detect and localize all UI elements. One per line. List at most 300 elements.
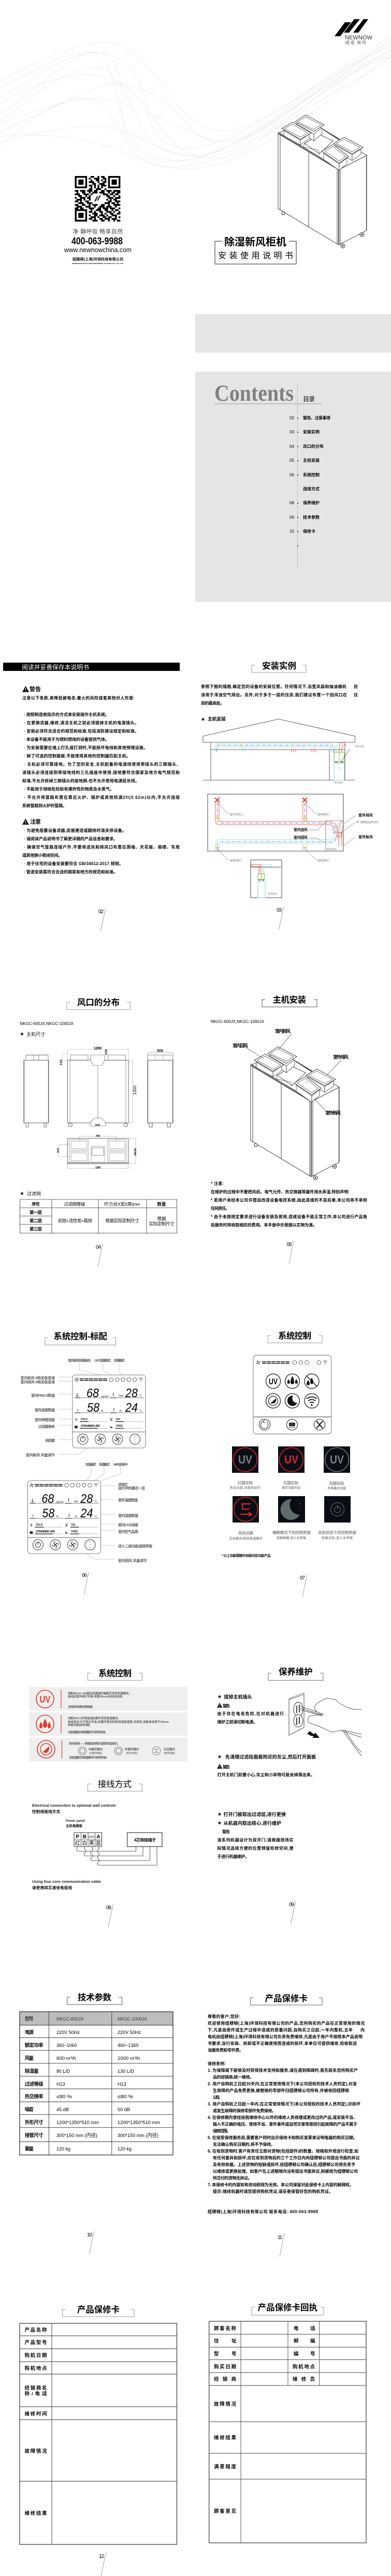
table: warranty card <box>20 2323 177 2544</box>
contents list: 05 <box>289 458 294 463</box>
cover: product illustration <box>278 115 367 248</box>
table: filter: 尺寸(长X宽X厚)mm <box>104 1202 140 1207</box>
cable note english: Using four core communication cable <box>32 1879 101 1884</box>
page 11: warranty introduction: 书要求,自行安装、拆卸或不正确使用而造成的损坏,本单位可提供维修,但收取适 <box>208 2041 357 2046</box>
status tile: red circle grey icon <box>232 1446 258 1473</box>
receipt labels: 号 <box>310 2351 315 2357</box>
diagram: floor plan of ducts: 室内回风口 <box>317 859 329 862</box>
page 11: warranty introduction: 电机由纽穗顿(上海)环境科技有限公司负责免费维修,凡是由于用户不按照本产品说明 <box>208 2034 363 2039</box>
contents list: 03 <box>289 430 294 434</box>
tile captions row 1: 有此功能,功能未运行 <box>230 1486 260 1490</box>
logo: NEWNOW: NEWNOW <box>345 35 373 41</box>
page 04: sub heading unit size: 主机尺寸 <box>26 1031 45 1037</box>
table row labels: 过滤等级 <box>25 2081 44 2087</box>
tile captions row 1: 红圈红标 <box>284 1480 299 1485</box>
page number 12 <box>99 2553 106 2576</box>
status tile: red circle grey icon: UV <box>238 1453 252 1466</box>
wiring diagram: A <box>96 1834 100 1840</box>
tile captions row 1: 表示功能开启 <box>282 1486 300 1490</box>
receipt labels: 维修员 <box>293 2376 315 2382</box>
power panel label: Power panel <box>66 1819 85 1823</box>
tile captions row 2 <box>229 1530 356 1541</box>
page 09: unplug step text: ★ <box>218 1694 222 1699</box>
icon: filter <box>287 1419 297 1430</box>
table column NKGC-1000JX: 1000 m³/h <box>118 2056 140 2061</box>
page 06: right labels: 室内温度数值 <box>118 1513 138 1518</box>
table: filter: 第三层 <box>30 1226 42 1232</box>
page 11: warranty introduction: 欢迎使用纽穗顿(上海)环境科技有限公司的产品,您所购买的产品在正常使用的情况 <box>208 2021 365 2026</box>
table column NKGC-600JX: 80 L/D <box>56 2069 70 2074</box>
page 06: left labels: 关机键 <box>45 1438 55 1443</box>
page number 08: 08 <box>106 1905 111 1911</box>
control panel display: annotated view 1: % <box>101 1410 104 1413</box>
page 06: panel 2 leader lines <box>77 1467 121 1559</box>
warranty card labels: 维修时间 <box>25 2411 47 2417</box>
page 06: heading 系统控制-标配 <box>45 1331 116 1345</box>
table column NKGC-1000JX: ≤80 % <box>118 2094 134 2100</box>
diagram: floor plan of ducts: 室内新风口 <box>317 813 329 816</box>
page number 06 <box>82 1572 89 1595</box>
contents list: 保修卡 <box>303 529 315 534</box>
page 03: intro text: 该用于浑浊空气排出。另外,对于多于一层的住房,我们建议布置一个回风口在 <box>201 692 347 697</box>
control panel display: annotated view 1: ℃ <box>139 1410 142 1413</box>
control panel display: annotated view 1: ug/m³ <box>101 1395 109 1398</box>
status tile: red circle red icon: UV <box>284 1453 298 1466</box>
QR code <box>75 176 120 222</box>
page 09: unplug step text: 维护之前请切断电源。 <box>218 1719 257 1724</box>
page 08: heading 接线方式 <box>88 1779 142 1791</box>
card: air direction control: 外循环模式 <box>125 1747 139 1751</box>
icon: wifi <box>305 1394 319 1408</box>
page 03: sub heading main unit installation <box>201 716 226 722</box>
page 11: warranty terms: 有任何差异和损坏,应在收到货物后的三个工作日内向纽穗顿公司提出书面的异议 <box>213 2155 360 2160</box>
page 04: model names: NKGC-600JX,NKGC-1000JX <box>20 1021 74 1026</box>
receipt labels: 邮 <box>294 2338 299 2344</box>
page 11: warranty introduction: 内 <box>360 2027 365 2032</box>
warranty card labels: 称 / 电 话 <box>25 2391 47 2397</box>
page 09: clean panel step text: 先清理过滤段面板附近的灰尘,然后打开面板 <box>225 1754 316 1760</box>
wiring caption chinese: 控制线接线方式 <box>32 1809 60 1814</box>
table column NKGC-600JX: ≤80 % <box>56 2094 73 2100</box>
table column NKGC-600JX: 600 m³/h <box>56 2056 76 2061</box>
page 03: intro text: 应 <box>354 684 358 689</box>
page 02: black heading bar: 阅读并妥善保存本说明书 <box>22 663 89 671</box>
control panel display: annotated view 2: % <box>56 1515 59 1518</box>
page number 07 <box>300 1574 307 1597</box>
page number 09: 09 <box>289 1902 294 1908</box>
receipt labels: 电 <box>294 2325 299 2332</box>
page 02: warning text: · 为安装需要在墙上打孔或打洞时,不能损坏电线和其他预埋设施。 <box>24 745 148 750</box>
page 06: panel 2 top labels <box>85 1462 128 1467</box>
control panel display: annotated view 1: CO₂ <box>116 1418 121 1421</box>
cover: flowing wave lines <box>0 36 391 169</box>
tile footnote: * 以上功能需额外加装对应功能产品 <box>222 1553 271 1558</box>
table column NKGC-1000JX: 460~1360 <box>118 2043 139 2048</box>
page 03: heading 安装实例 <box>252 661 306 672</box>
status tile: grey circle grey icon: UV <box>330 1453 344 1466</box>
table column NKGC-600JX: 45 dB <box>56 2107 69 2113</box>
control panel display: annotated view 2: In <box>75 1515 77 1518</box>
contents list: 连接方式 <box>303 486 320 491</box>
page 02: warning text: 该插头必须连接到带接地线的三孔插座中使用,接地要符合国家及地方电气规范和 <box>22 770 180 775</box>
receipt labels: 故障情况 <box>214 2401 236 2407</box>
card: UV sterilisation: 启动后紫外线灯开启,杀菌30min后自动关闭。 <box>68 1694 125 1699</box>
page 05: heading 主机安装 <box>262 995 317 1007</box>
page 06: panel 2 top labels: WIFI连接中 <box>113 1462 128 1467</box>
tile captions row 1 <box>230 1480 346 1490</box>
wiring diagram: 红 <box>75 1840 80 1847</box>
wiring diagram: 白 <box>82 1840 87 1847</box>
table column NKGC-600JX: 300*150 mm (内径) <box>56 2132 97 2139</box>
page 02: notice text: · 管道安装需符合合适的国家和地方的规范和标准。 <box>24 869 118 874</box>
page 06: heading 系统控制-标配: 系统控制-标配 <box>54 1331 108 1341</box>
control panel display: annotated view 1: In <box>120 1410 122 1413</box>
table column NKGC-1000JX: 50 dB <box>118 2107 130 2113</box>
page number 02: 02 <box>98 909 104 915</box>
page 02: notice heading <box>22 818 41 825</box>
cover: company english name: NEWNOW(SHANGHAI)ENVIRONMENT TECHNOLOGY CO.,LTD <box>72 262 124 265</box>
tile captions row 1: 红圈灰标 <box>238 1480 253 1485</box>
table row labels: 热交换率 <box>25 2094 44 2100</box>
page 11: warranty terms: 提示:维修机器时请您提供购机凭证,请妥善保管好您的购机凭证。 <box>213 2189 333 2194</box>
contents list: 风口的分布 <box>303 444 324 449</box>
page number 03 <box>277 906 284 930</box>
page 11: warranty terms: 7. 本保修卡的内容如有改动则视为无效。本公司保留对此保修卡上内容的解释权。 <box>208 2182 354 2187</box>
page 09: unplug step text: 由于存在电击危险,在对机器进行 <box>218 1711 284 1716</box>
cover: slogan: 净·静呼吸 畅享自然 <box>73 228 123 235</box>
page 11: company contact line: 纽穗顿(上海)环境科技有限公司 联系电话: 400-063-9988 <box>208 2209 318 2214</box>
table: filter: 初效+活性炭+高效 <box>58 1218 92 1223</box>
status tile: red circle red icon <box>278 1446 305 1473</box>
page 06: right labels: 运行中的模式一览 <box>118 1486 145 1490</box>
page number 11: 11 <box>278 2235 282 2241</box>
control panel display: annotated view 1: Out <box>119 1395 123 1398</box>
contents list: 技术参数 <box>303 515 320 520</box>
page 04: sub heading unit size: ★ <box>20 1032 24 1036</box>
tile captions row 2: 轻触开机,进入主界面 <box>322 1536 353 1540</box>
drawing: front view with dimensions: 900 <box>95 1124 100 1127</box>
page 05: product illustration with labels: 室外新风 <box>325 1110 341 1116</box>
page 06: top labels: 加湿模式 <box>114 1358 125 1363</box>
page 11: warranty terms: 及有效依据。上述货物的短缺或损坏,经纽穗顿公司确认后,纽穗顿公司将负责予 <box>213 2162 355 2167</box>
contents list: 10 <box>289 529 294 534</box>
drawing: front view with dimensions: 100 <box>60 1059 63 1065</box>
control panel display: annotated view 2: 24 <box>80 1506 93 1520</box>
warranty card labels: 产品型号 <box>25 2339 47 2346</box>
page 08: heading 系统控制 <box>88 1668 142 1680</box>
card: air direction control: (新风除菌) <box>126 1751 138 1755</box>
receipt labels <box>214 2325 315 2514</box>
icon: UV <box>266 1374 281 1388</box>
page 13: heading 产品保修卡回执 <box>252 2303 324 2315</box>
contents list: 04 <box>289 444 294 449</box>
page 11: warranty introduction: 尊敬的客户,您好: <box>208 2014 240 2019</box>
contents heading chinese: 目录 <box>303 396 315 403</box>
page 09: unplug step text <box>217 1694 284 1724</box>
page 02: notice text: · 用于住宅的设备安装要符合 GB/34012-2017 规则。 <box>24 861 123 866</box>
card: air direction control: (内循环除菌) <box>89 1751 103 1755</box>
receipt labels: 编 <box>294 2351 299 2357</box>
page 02: warning text: 系统管路到火炉的管路。 <box>22 803 67 808</box>
page 06: right labels: 室内CO2浓度 <box>118 1523 138 1527</box>
page 09: clean panel step text: 警告 <box>223 1764 230 1769</box>
page 02: warning text: · 安装必须符合适合的规范和标准,包括消防建设规定和标准。 <box>24 728 139 734</box>
page 02: notice text: · 为避免阻塞设备滤器,房屋建造或翻修时请关停设备。 <box>24 828 126 833</box>
page 07: heading 系统控制 <box>268 1330 322 1343</box>
page 05: notes: 在维护的过程中不要把风机、电气元件、热交换器等器件用水弄湿,特别声明: <box>211 1189 350 1194</box>
table row labels: 重量 <box>25 2146 34 2152</box>
wiring diagram: 4芯快接端子 <box>134 1837 156 1842</box>
logo: NEWNOW: 纽诺 新风 <box>345 40 366 45</box>
page 11: heading 产品保修卡: 产品保修卡 <box>265 1994 308 2003</box>
control panel display: annotated view 2: 58 <box>42 1506 55 1520</box>
receipt labels: 满意程度 <box>214 2464 236 2470</box>
receipt labels: 购买日期 <box>214 2364 236 2370</box>
page 09: clean panel step text: ★ <box>218 1754 222 1759</box>
receipt labels: 编 <box>310 2338 315 2344</box>
drawing: front view with dimensions: 1200 <box>94 1047 102 1050</box>
illustration: unplugging hand <box>289 1693 361 1756</box>
receipt labels: 址 <box>231 2338 237 2344</box>
control panel display: annotated view 1 <box>73 1375 146 1448</box>
contents list: 系统控制 <box>303 472 320 477</box>
contents list: 02 <box>289 416 294 420</box>
page 05: notes: * 由于未按规定要求进行设备安装及使用,造成设备不能正常工作,本公司进行产品售 <box>211 1214 367 1219</box>
drawing: top view with dimensions: 750 <box>96 1135 100 1138</box>
table: warranty card receipt <box>209 2321 366 2543</box>
page 04: sub heading filter: ★ <box>20 1191 24 1196</box>
page 06: left labels: 室内甲醛浓度 <box>35 1417 55 1422</box>
page 06: right labels: 室内回风 风量调节 <box>118 1558 147 1563</box>
page 06: left labels: 过滤器寿命 <box>38 1424 55 1429</box>
page 05: model names: NKGC-600JX,NKGC-1000JX <box>211 1019 265 1024</box>
tile captions row 2: 轻触唤醒,进入主界面 <box>277 1536 306 1540</box>
page 11: heading 产品保修卡 <box>251 1994 322 2005</box>
cover: title frame <box>215 236 296 264</box>
drawing: top view with dimensions: 300 <box>57 1148 60 1153</box>
drawing: top view with dimensions: 1200 <box>95 1166 100 1169</box>
table column NKGC-600JX: H13 <box>56 2082 65 2087</box>
drawing: front view with dimensions <box>60 1047 137 1127</box>
warranty card labels: 购机地点 <box>25 2365 47 2372</box>
table: filter: 第二层 <box>30 1218 42 1223</box>
warranty card labels: 维修结果 <box>25 2510 47 2516</box>
page 04: sub heading filter <box>20 1191 41 1196</box>
page 05: product illustration with labels: 室内回风 <box>233 1043 248 1048</box>
page 03: intro text: 住 <box>354 692 358 697</box>
wiring caption english: Electrical connection to optional wall controls <box>32 1803 116 1808</box>
page 06: right labels <box>118 1482 152 1563</box>
page 03: sub heading main unit installation: ★ <box>201 717 205 722</box>
page 02: warning text <box>22 695 180 808</box>
page 13: heading 产品保修卡回执: 产品保修卡回执 <box>258 2303 318 2312</box>
wiring diagram: P <box>76 1834 79 1840</box>
tile captions row 1: 灰圈灰标 <box>329 1481 344 1486</box>
table column NKGC-600JX <box>56 2016 99 2152</box>
wiring diagram: B <box>83 1834 86 1840</box>
table column NKGC-1000JX: NKGC-1000JX <box>118 2016 148 2022</box>
contents list: 安装实例 <box>303 429 320 434</box>
page number 04: 04 <box>96 1245 101 1250</box>
drawing: front view with dimensions: 100 <box>105 1049 108 1055</box>
warranty card labels: 经销商名 <box>25 2385 47 2391</box>
page 11: warranty terms: 保修条例: <box>208 2061 226 2066</box>
diagram: house section: 新风机房 <box>335 781 343 784</box>
page 09: filter and core step text: ★ <box>218 1812 222 1817</box>
diagram: floor plan of ducts: 闭门微模型检修试风 <box>356 821 379 824</box>
icon: sleep <box>285 1394 299 1408</box>
page 06: panel 2 top labels: 风道模式 <box>99 1462 110 1467</box>
table: filter <box>20 1199 177 1233</box>
page 08: heading 系统控制: 系统控制 <box>98 1668 132 1678</box>
page 09: heading 保养维护: 保养维护 <box>279 1666 313 1677</box>
page 03: heading 安装实例: 安装实例 <box>262 661 296 671</box>
control panel display: annotated view 2: CH₂O <box>36 1524 43 1527</box>
drawing: top view with dimensions <box>57 1135 137 1169</box>
page 02: warning text: · 主机必须可靠接地。为了您的安全,主机配备的电源线使用带接头的三脚插头, <box>24 762 178 767</box>
page 09: unplug step text: 警告 <box>223 1703 230 1708</box>
table column NKGC-600JX: 360~1060 <box>56 2043 77 2048</box>
page 05: notes <box>211 1181 367 1227</box>
page 05: notes: * 若用户未经本公司许擅自改造设备电控系统,由此造成的不良后果,本公司将不承担 <box>211 1197 367 1203</box>
tile captions row 1: 不具备此功能 <box>327 1486 346 1490</box>
page 04: sub heading filter: 过滤网 <box>27 1191 41 1196</box>
icon: humidify <box>285 1374 299 1388</box>
receipt labels: 型 <box>214 2351 219 2357</box>
warranty card labels: 产品名称 <box>25 2327 47 2333</box>
product title: 除湿新风柜机 <box>224 236 286 248</box>
drawing: side view right: 506 <box>157 1049 163 1053</box>
card: air direction control: 注*加湿模式与除湿模式不可同时开启。 <box>69 1755 109 1760</box>
wiring diagram: 黑 <box>89 1840 94 1847</box>
table: filter: 数量 <box>157 1202 166 1207</box>
page number 05: 05 <box>287 1242 292 1248</box>
page number 02 <box>98 908 106 931</box>
page 03: sub heading main unit installation: 主机安装 <box>208 716 226 722</box>
page 09: filter and core step text: 该系列机器设计为双开门,请根据现场实 <box>218 1837 293 1842</box>
contents list: 主机安装 <box>303 458 320 463</box>
page 11: warranty terms: 2. 用户自购机之日起30天内,在正常使用情况下(本公司授权的技术人员判定),对发 <box>208 2081 357 2086</box>
cover: hotline: 400-063-9988 <box>71 236 123 247</box>
status tile: power off <box>324 1496 351 1523</box>
page 11: warranty terms: 无法确认购买日期的,将不予保修。 <box>213 2142 275 2147</box>
page 06: top labels: 室内新风风速自动 <box>68 1358 91 1363</box>
page 11: warranty terms: 1. 为保障阁下能够及时获得技术支持和服务,请在遇到障碍时,首先联系您所购买产 <box>208 2068 358 2073</box>
page 07: heading 系统控制: 系统控制 <box>278 1330 311 1341</box>
diagram: floor plan of ducts: 室外排风 <box>358 813 373 817</box>
table row labels <box>25 2016 44 2152</box>
control panel display: annotated view 2: Out <box>74 1500 78 1503</box>
card: humidification: 注*加湿模式与除湿模式不可同时开启。 <box>68 1730 108 1734</box>
diagram: floor plan of ducts: 室外新风 <box>358 835 373 839</box>
drawing: top view with dimensions: 600.50 <box>134 1148 137 1155</box>
page number 06: 06 <box>82 1573 87 1578</box>
drawing: side view right <box>148 1049 173 1127</box>
control panel display: annotated view 2: TVOC <box>71 1530 78 1533</box>
table row labels: 型号 <box>25 2016 34 2022</box>
table: filter: 序号 <box>32 1202 40 1207</box>
page 11: warranty terms: 3. 用户自购机之日起一年内,在正常使用情况下(本公司授权的技术人员判定),对损坏 <box>208 2101 360 2106</box>
control panel display: annotated view 2: ug/m³ <box>56 1501 64 1504</box>
page 11: warranty terms: 6. 在收到货物时,客户有责任立即对货物(包括部件)的数量、规格和外观进行检查,如 <box>208 2148 358 2154</box>
panel: contents <box>195 372 391 602</box>
tile captions row 2: 睡眠模式下的控制界面 <box>272 1530 311 1535</box>
manual subtitle: 安装使用说明书 <box>218 251 293 260</box>
page 11: warranty terms <box>208 2061 360 2194</box>
table column NKGC-1000JX: 300*150 mm (内径) <box>118 2132 158 2139</box>
card: UV sterilisation: UV <box>39 1694 51 1705</box>
page number 09 <box>289 1901 296 1924</box>
wiring diagram: GND <box>89 1836 95 1839</box>
control panel display: annotated view 1: 28 <box>125 1386 138 1400</box>
icon: reset <box>259 1419 270 1430</box>
contents list: 警告、注意事项 <box>303 415 330 420</box>
page 11: warranty terms: 以维修或更换处理。如客户在上述期限内没有提出书面异议,则被视为纽穗顿公司 <box>213 2169 358 2174</box>
page 09: filter and core step text: 际情况选择方便的位置预留检修空间,便 <box>218 1846 293 1851</box>
page 09: filter and core step text <box>218 1811 293 1859</box>
receipt labels: 话 <box>310 2325 315 2332</box>
tile captions row 2: 正压模式/新风除湿模式 <box>229 1536 262 1541</box>
card: UV sterilisation <box>29 1687 187 1711</box>
page 04: heading 风口的分布 <box>67 998 131 1009</box>
contents list: 06 <box>289 473 294 477</box>
tile captions row 2: 关机状态下的控制界面 <box>318 1530 356 1535</box>
control panel display: annotated view 1: CH₂O <box>81 1418 88 1421</box>
receipt labels: 住 <box>214 2338 219 2344</box>
status tile: sleep mode <box>278 1496 305 1523</box>
page 10: heading 技术参数: 技术参数 <box>78 1992 112 2002</box>
card: air direction control <box>29 1738 187 1762</box>
icon: service tools <box>314 1419 325 1430</box>
wiring diagram: 蓝 <box>96 1840 101 1847</box>
receipt labels: 顾客意见 <box>214 2508 236 2514</box>
page 05: product illustration with labels <box>233 1028 349 1180</box>
card: UV sterilisation: 注*待杀时,请先切断电源。 <box>68 1705 95 1709</box>
page number 12: 12 <box>99 2554 104 2559</box>
page 02: warning text: · 不能用于排除危险和有爆炸性的物质及水蒸气。 <box>24 786 114 792</box>
diagram: machine room section: 新风机房 <box>268 892 278 896</box>
page 09: filter and core step text: 于进行机器维护。 <box>218 1854 249 1859</box>
control panel display: annotated view 2: ℃ <box>94 1515 97 1518</box>
table column NKGC-1000JX <box>118 2016 160 2152</box>
power panel label: 主机电路板 <box>66 1823 83 1828</box>
page 11: warranty terms: 输入不正确的电压、使用不当、意外事件或自然灾害等原因引起故障的产品不属于 <box>213 2121 357 2127</box>
grey band <box>195 314 391 353</box>
page 02: notice text: · 确保空气管路连接户外,不要将进风和排风口布置在围墙、天花板、阁楼、车库 <box>24 844 180 850</box>
page 02: warning text: · 不允许将管路布置在靠近火炉、锅炉或其他热源2ft(0.62m)以内,不允许连接 <box>24 795 180 800</box>
card: air direction control: (新风除菌) <box>164 1751 175 1755</box>
page 05: product illustration with labels: 室外排风 <box>333 1054 349 1060</box>
table column NKGC-600JX: 1200*1350*510 mm <box>56 2120 99 2126</box>
cover: company name: 纽穗顿(上海)环境科技有限公司 <box>73 257 123 261</box>
table: filter: 实际定制尺寸 <box>149 1221 175 1226</box>
page 02: warning text: 标准,不允许拆掉三脚插头的接地脚,也不允许使用电源延长线。 <box>22 778 139 783</box>
control panel display: annotated view 2: ℃ <box>94 1500 97 1503</box>
logo: NEWNOW <box>335 19 373 45</box>
diagram: floor plan of ducts: 室内送风 <box>294 827 308 832</box>
receipt labels: 维修结果 <box>214 2435 236 2441</box>
wiring diagram <box>74 1833 162 1865</box>
page 05: heading 主机安装: 主机安装 <box>272 995 307 1005</box>
page 06: left labels: 室内新风 风量调节 <box>26 1453 55 1457</box>
page 06: panel 2 top labels: 加湿模式 <box>85 1462 96 1467</box>
page 11: warranty introduction <box>208 2014 365 2053</box>
table column NKGC-600JX: 220V 50Hz <box>56 2030 80 2036</box>
page 06: right labels: 状态栏 <box>118 1482 128 1487</box>
page number 08 <box>106 1904 113 1927</box>
page 11: warranty terms: 品的经销商,统一维修。 <box>213 2074 254 2080</box>
cable note chinese: 请使用四芯通信电缆线 <box>32 1885 73 1890</box>
